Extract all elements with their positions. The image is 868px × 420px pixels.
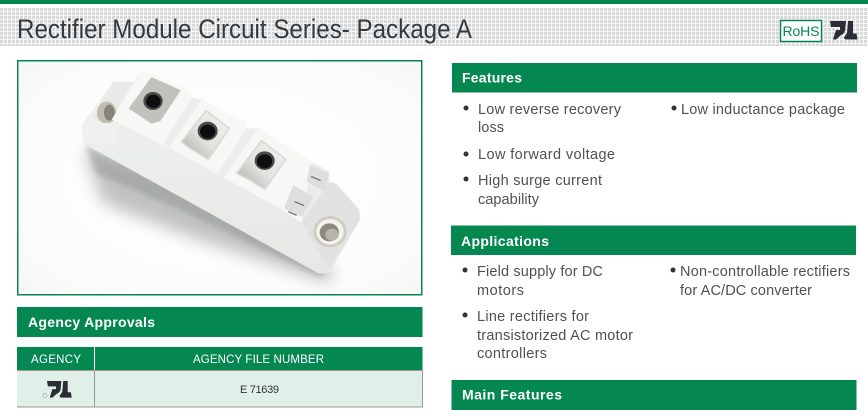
list: features right: Low inductance package: [681, 102, 845, 118]
left end recess: [90, 82, 133, 123]
list: applications right: Non-controllable rectifiers: [680, 264, 850, 280]
module top face: [112, 70, 312, 223]
heading: Applications: Applications: [461, 233, 549, 249]
list: features left: High surge current: [478, 173, 602, 189]
table row: [17, 370, 422, 407]
terminal plate 3: [237, 141, 286, 189]
left front wedge: [82, 116, 118, 143]
product: rectifier module: [82, 70, 360, 282]
list: applications right: for AC/DC converter: [680, 283, 812, 299]
list: features left: Low forward voltage: [478, 147, 615, 163]
heading: Main Features: [452, 380, 856, 410]
heading: Features: [452, 63, 857, 92]
panel: product photo: [18, 61, 422, 295]
list: features left: Low reverse recovery: [478, 102, 622, 118]
left washer: [97, 102, 116, 124]
list: features left: [464, 102, 622, 208]
right end mount: [302, 182, 360, 268]
list: applications right: [670, 264, 850, 299]
table: agency approvals: [17, 347, 422, 407]
heading: Applications: [451, 226, 856, 255]
right washer: [313, 216, 347, 247]
table header: [17, 347, 422, 370]
list: applications left: motors: [477, 283, 524, 299]
terminal plate 1: [130, 78, 179, 123]
heading: Main Features: Main Features: [462, 386, 562, 402]
list: applications left: controllers: [477, 346, 547, 362]
table header: AGENCY FILE NUMBER: [193, 354, 324, 366]
icon: UL mark: [43, 381, 72, 398]
heading: Agency Approvals: [17, 307, 422, 337]
module silhouette: [82, 70, 360, 273]
RoHS badge: RoHS: [782, 23, 820, 39]
list: applications left: [462, 264, 633, 362]
table header: AGENCY: [31, 354, 81, 366]
top green rule: [0, 0, 868, 4]
title: Rectifier Module Circuit Series- Package A: [17, 14, 472, 44]
terminal recesses: [307, 165, 329, 192]
heading: Agency Approvals: Agency Approvals: [28, 314, 155, 330]
dotted header band: [0, 8, 868, 46]
heading: Features: Features: [462, 70, 522, 86]
terminal plate 2: [182, 111, 229, 159]
list: applications left: Field supply for DC: [477, 264, 603, 280]
list: applications left: Line rectifiers for: [477, 309, 589, 325]
file number: E 71639: [240, 384, 279, 396]
icon: UL certification mark: [830, 21, 858, 40]
list: applications left: transistorized AC motor: [477, 328, 633, 344]
list: features left: capability: [478, 192, 540, 208]
list: features left: loss: [478, 120, 504, 136]
RoHS badge: [780, 20, 822, 42]
block grooves: [163, 97, 258, 178]
